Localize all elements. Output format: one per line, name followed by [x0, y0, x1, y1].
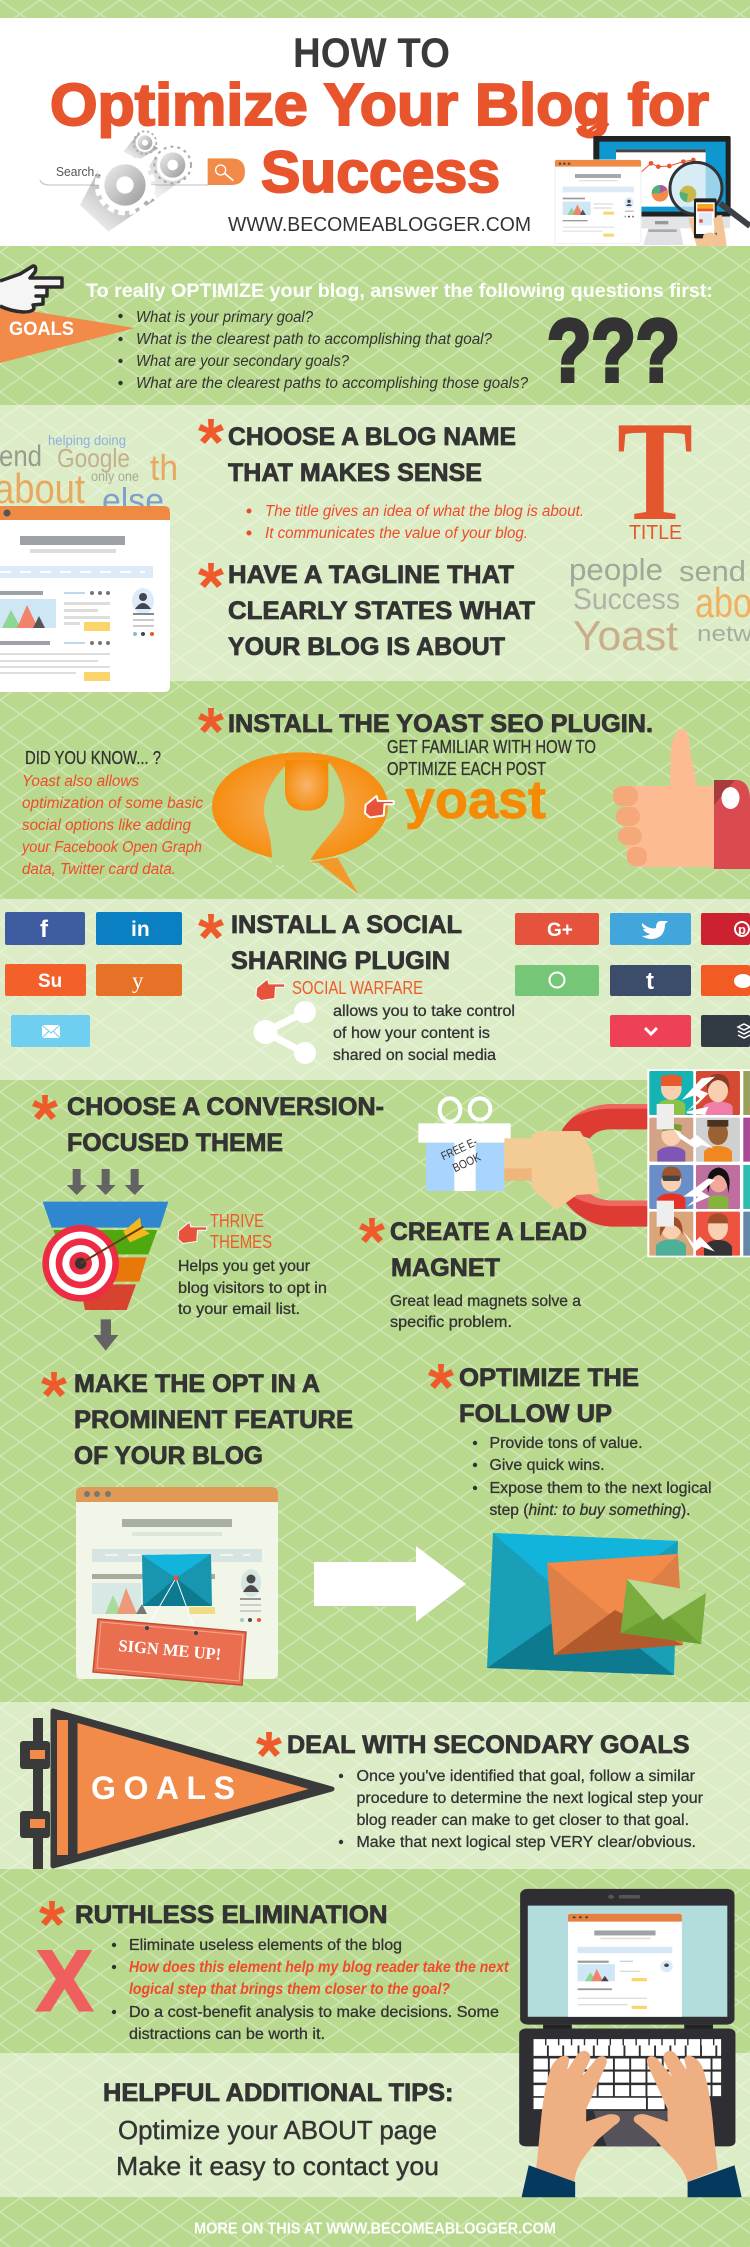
heading: lead magnet: CREATE A LEAD	[390, 1218, 587, 1246]
heading: tagline: YOUR BLOG IS ABOUT	[228, 633, 505, 661]
icon: title letter T: T	[617, 392, 693, 550]
panel: conversion theme and lead magnet	[32, 1069, 750, 1685]
heading: conversion theme: FOCUSED THEME	[67, 1129, 283, 1157]
icon: red pointing hand	[178, 1222, 207, 1243]
word cloud left: only one	[91, 468, 139, 484]
asterisk	[32, 1095, 58, 1120]
thrive themes description: blog visitors to opt in	[178, 1280, 327, 1297]
elimination list: Eliminate useless elements of the blog	[129, 1937, 402, 1954]
icon: red pointing hand	[256, 979, 285, 1000]
heading: opt in: OF YOUR BLOG	[74, 1442, 263, 1470]
icon: yoast logo	[212, 752, 388, 894]
social buttons left: f	[40, 916, 49, 943]
asterisk	[198, 563, 224, 588]
asterisk	[39, 1901, 65, 1926]
lead magnet description: Great lead magnets solve a	[390, 1293, 581, 1310]
goal questions list	[118, 309, 528, 392]
red bullet list: It communicates the value of your blog.	[265, 525, 528, 542]
icon: laptop with typing hands	[519, 1889, 742, 2197]
heading: follow up: OPTIMIZE THE	[459, 1364, 639, 1392]
elimination list: How does this element help my blog reader take the next	[129, 1959, 509, 1976]
asterisk	[41, 1372, 67, 1397]
icon: pennant flag: GOALS	[91, 1770, 235, 1806]
heading: helpful tips: HELPFUL ADDITIONAL TIPS:	[103, 2079, 454, 2107]
heading: opt in: MAKE THE OPT IN A	[74, 1370, 320, 1398]
icon: share	[254, 1001, 316, 1064]
icon: pointing hand	[0, 266, 62, 312]
browser window illustration	[0, 506, 170, 692]
red bullet list: The title gives an idea of what the blog is about.	[265, 503, 584, 520]
social warfare description	[333, 1003, 515, 1064]
icon: thumbs up	[613, 729, 750, 869]
panel: ruthless elimination	[36, 1901, 509, 2043]
follow up list: Expose them to the next logical	[490, 1480, 712, 1497]
heading: opt in	[74, 1370, 353, 1470]
panel: yoast plugin	[21, 708, 750, 894]
heading: choose a blog name: CHOOSE A BLOG NAME	[228, 423, 516, 451]
tips text	[116, 2115, 439, 2181]
word cloud right: Success	[573, 583, 680, 616]
icon: search bar and gears	[40, 131, 245, 232]
word cloud right: people	[569, 552, 663, 587]
goal questions list: What are your secondary goals?	[136, 353, 349, 370]
icon: red X: X	[36, 1934, 93, 2030]
heading: tagline: CLEARLY STATES WHAT	[228, 597, 535, 625]
arrow	[314, 1546, 466, 1622]
elimination list: distractions can be worth it.	[129, 2026, 325, 2043]
icon: magnet, hand and gift: BOOK	[450, 1150, 483, 1175]
heading: social plugin: INSTALL A SOCIAL	[231, 911, 462, 939]
social buttons left: in	[131, 918, 150, 941]
follow up list: Give quick wins.	[490, 1457, 604, 1474]
did you know text: optimization of some basic	[22, 795, 203, 812]
word cloud left: th	[150, 447, 178, 488]
yoast wordmark: yoast	[405, 770, 546, 830]
social buttons left	[5, 912, 182, 1047]
heading: secondary goals: DEAL WITH SECONDARY GOALS	[287, 1731, 690, 1759]
icon: monitor, browser window, magnifier and phone	[555, 120, 750, 246]
title: WWW.BECOMEABLOGGER.COM	[228, 213, 531, 236]
heading: ruthless elimination: RUTHLESS ELIMINATION	[75, 1901, 388, 1929]
icon: magnet, hand and gift	[418, 1069, 750, 1257]
word cloud left: helping doing	[48, 432, 126, 448]
panel: blog name and tagline	[0, 392, 750, 692]
did you know text: your Facebook Open Graph	[21, 839, 202, 856]
asterisk	[198, 914, 224, 939]
word cloud right: send	[679, 556, 746, 588]
thrive themes label	[210, 1211, 272, 1252]
heading: tagline: HAVE A TAGLINE THAT	[228, 561, 514, 589]
asterisk	[428, 1364, 454, 1389]
word cloud right: Yoast	[573, 612, 678, 659]
intro text: To really OPTIMIZE your blog, answer the following questions first:	[86, 281, 713, 302]
social buttons right: p	[738, 922, 746, 937]
familiar text: GET FAMILIAR WITH HOW TO	[387, 737, 596, 757]
heading: choose a blog name	[228, 423, 516, 487]
tips text: Make it easy to contact you	[116, 2151, 439, 2181]
did you know text	[21, 748, 203, 878]
icon: envelopes	[487, 1533, 706, 1675]
heading: conversion theme	[67, 1093, 384, 1157]
panel: goals	[0, 266, 713, 400]
icon: goals pennant	[0, 306, 135, 363]
secondary goals list: Make that next logical step VERY clear/obvious.	[356, 1834, 696, 1851]
footer: MORE ON THIS AT WWW.BECOMEABLOGGER.COM	[194, 2220, 556, 2238]
familiar text: OPTIMIZE EACH POST	[387, 759, 546, 779]
icon: pennant flag	[20, 1711, 332, 1869]
social warfare description: shared on social media	[333, 1047, 496, 1064]
question marks: ???	[547, 301, 680, 400]
heading: opt in: PROMINENT FEATURE	[74, 1406, 353, 1434]
heading: social plugin	[231, 911, 462, 975]
social buttons left: Su	[38, 971, 62, 992]
goal questions list: What is the clearest path to accomplishing that goal?	[136, 331, 492, 348]
panel: helpful tips	[103, 2079, 454, 2181]
social buttons right	[515, 913, 750, 1047]
elimination list: Do a cost-benefit analysis to make decisions. Some	[129, 2004, 499, 2021]
word cloud left: else	[102, 482, 164, 520]
secondary goals list: Once you've identified that goal, follow a similar	[356, 1768, 696, 1785]
goals label: GOALS	[9, 319, 74, 340]
social buttons right: G+	[547, 920, 573, 941]
asterisk	[256, 1732, 282, 1757]
panel: social sharing plugin	[5, 911, 750, 1064]
icon: magnet, hand and gift: FREE E-	[439, 1134, 479, 1163]
heading: install yoast: INSTALL THE YOAST SEO PLUGIN.	[228, 710, 653, 738]
icon: funnel with target	[42, 1169, 168, 1351]
title: HOW TO	[293, 29, 450, 76]
did you know text: DID YOU KNOW... ?	[25, 748, 161, 768]
goal questions list: What are the clearest paths to accomplishing those goals?	[136, 375, 528, 392]
heading: choose a blog name: THAT MAKES SENSE	[228, 459, 482, 487]
heading: lead magnet: MAGNET	[391, 1254, 500, 1282]
lead magnet description	[390, 1293, 581, 1331]
familiar text	[387, 737, 596, 779]
thrive themes description: to your email list.	[178, 1301, 300, 1318]
did you know text: Yoast also allows	[22, 773, 139, 790]
title	[50, 29, 709, 236]
heading: conversion theme: CHOOSE A CONVERSION-	[67, 1093, 384, 1121]
browser window with sign-up sign: SIGN ME UP!	[118, 1636, 222, 1664]
did you know text: data, Twitter card data.	[22, 861, 176, 878]
word cloud left: end	[0, 440, 42, 473]
social warfare description: of how your content is	[333, 1025, 490, 1042]
title: Success	[261, 140, 500, 205]
word cloud left	[0, 432, 178, 520]
goal questions list: What is your primary goal?	[136, 309, 313, 326]
word cloud right	[569, 552, 750, 659]
red bullet list	[246, 503, 584, 542]
title: Optimize Your Blog for	[50, 72, 709, 138]
asterisk	[198, 708, 224, 733]
heading: tagline	[228, 561, 535, 661]
social warfare label: SOCIAL WARFARE	[292, 978, 423, 998]
browser window with sign-up sign	[76, 1487, 278, 1685]
icon: title letter T: TITLE	[629, 522, 682, 544]
social buttons left: y	[132, 968, 144, 993]
secondary goals list	[339, 1768, 704, 1851]
social buttons right: t	[646, 968, 654, 995]
asterisk	[198, 419, 224, 444]
social warfare description: allows you to take control	[333, 1003, 515, 1020]
tips text: Optimize your ABOUT page	[118, 2115, 437, 2145]
did you know text: social options like adding	[22, 817, 191, 834]
lead magnet description: specific problem.	[390, 1314, 512, 1331]
follow up list: Provide tons of value.	[490, 1435, 642, 1452]
thrive themes description: Helps you get your	[178, 1258, 311, 1275]
icon: search bar and gears: Search..	[56, 164, 101, 179]
secondary goals list: procedure to determine the next logical step your	[356, 1790, 704, 1807]
secondary goals list: blog reader can make to get closer to that goal.	[356, 1812, 689, 1829]
panel: secondary goals	[20, 1711, 704, 1869]
thrive themes description	[178, 1258, 327, 1318]
heading: social plugin: SHARING PLUGIN	[231, 947, 450, 975]
heading: follow up: FOLLOW UP	[459, 1400, 612, 1428]
word cloud right: netw	[697, 621, 750, 646]
heading: follow up	[459, 1364, 639, 1428]
follow up list: step (hint: to buy something).	[490, 1502, 690, 1519]
thrive themes label: THRIVE	[210, 1211, 264, 1231]
elimination list: logical step that brings them closer to the goal?	[129, 1981, 450, 1998]
asterisk	[359, 1218, 385, 1243]
elimination list	[112, 1937, 509, 2043]
icon: red pointing hand	[365, 796, 394, 817]
heading: lead magnet	[390, 1218, 587, 1282]
word cloud left: Google	[57, 443, 130, 473]
follow up list	[473, 1435, 712, 1519]
thrive themes label: THEMES	[210, 1232, 272, 1252]
